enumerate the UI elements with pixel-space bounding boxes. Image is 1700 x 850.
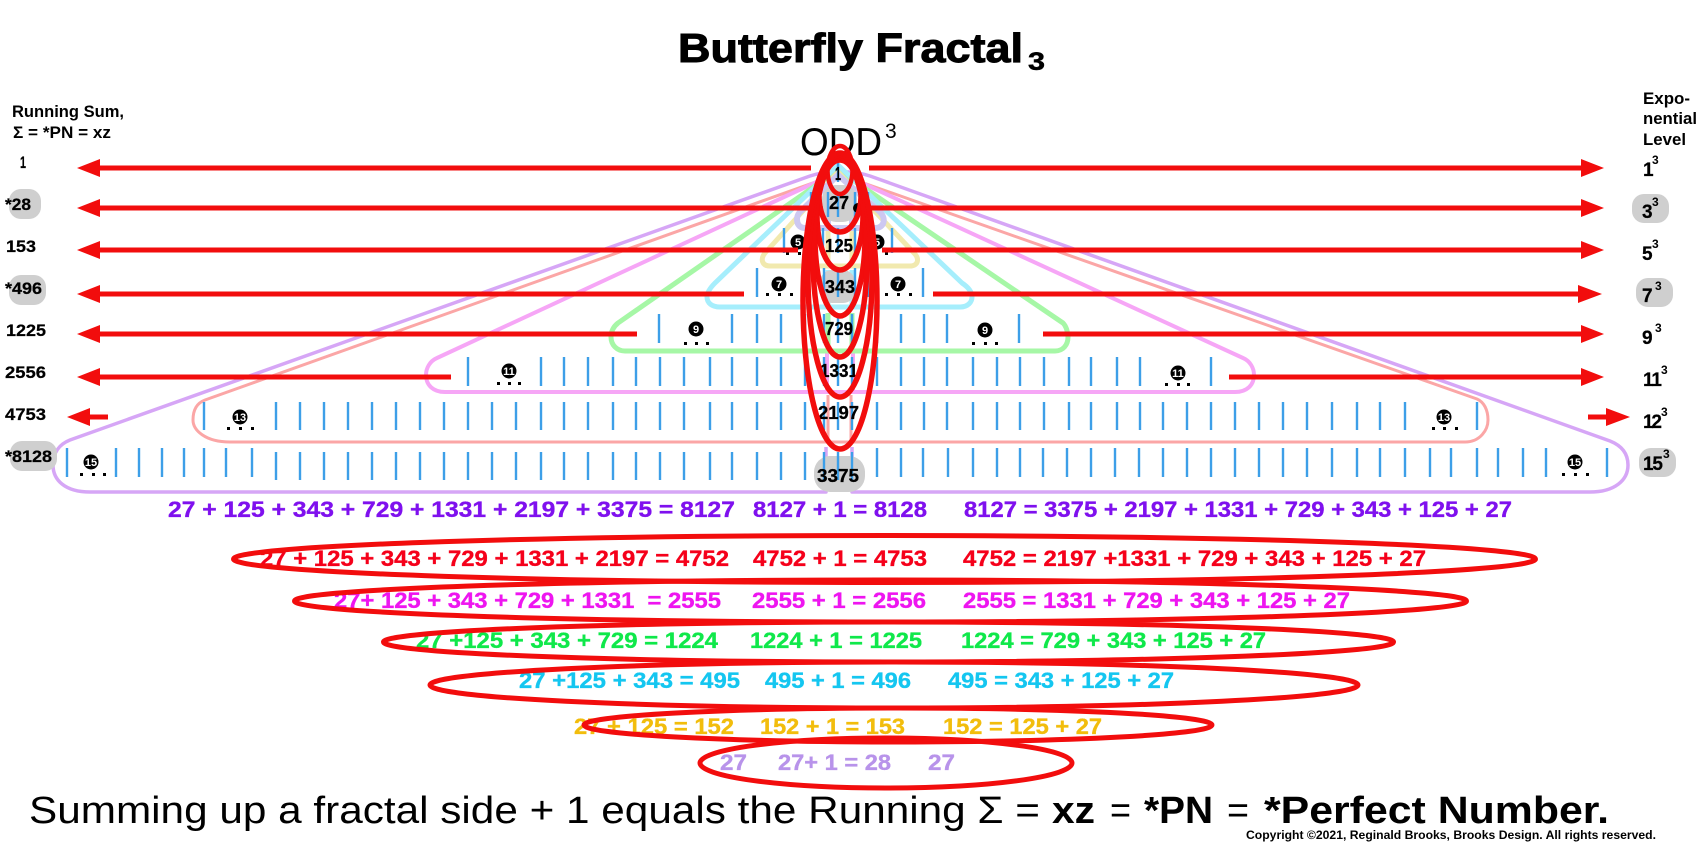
right column: exponential levels: 3 [1661, 405, 1668, 419]
equation row: level 15: 8127 = 3375 + 2197 + 1331 + 729 + 343 + 125 + 27 [964, 497, 1512, 522]
copyright: Copyright ©2021, Reginald Brooks, Brooks Design. All rights reserved. [1246, 828, 1656, 842]
wing: level 7 [707, 165, 972, 307]
left column: running sums: 4753 [5, 405, 46, 424]
central cube values: 343 [825, 277, 855, 297]
equation row: level 13: 4752 = 2197 +1331 + 729 + 343 + 125 + 27 [963, 546, 1426, 571]
central cube values: 3375 [817, 466, 859, 486]
footer statement: = [1110, 790, 1131, 832]
equation row: level 3: 27 [720, 750, 747, 775]
equation row: level 5: 27 + 125 = 152 [574, 714, 734, 739]
wing: level 9 [611, 170, 1068, 351]
right column: exponential levels: 3 [1663, 447, 1670, 461]
equation row: level 15: 27 + 125 + 343 + 729 + 1331 + 2197 + 3375 = 8127 [168, 497, 735, 522]
right column: exponential levels: 3 [1652, 237, 1659, 251]
right column: exponential levels: 12 [1643, 412, 1662, 433]
title: Butterfly Fractal [678, 25, 1023, 71]
heading: exponential level column: Level [1643, 130, 1686, 149]
numbered level badges with ellipsis dots: 11 [1172, 368, 1184, 380]
equation row: level 15: 8127 + 1 = 8128 [753, 497, 927, 522]
footer statement: = [1227, 790, 1249, 832]
equation row: level 5 [574, 714, 1102, 739]
equation row: level 11 [334, 588, 1350, 613]
wing: level 3 [797, 175, 884, 228]
left column: running sums: 1225 [6, 321, 46, 340]
wing: level 15 [53, 172, 1628, 492]
right column: exponential levels: 11 [1643, 370, 1662, 391]
equation row: level 13: 27 + 125 + 343 + 729 + 1331 + 2197 = 4752 [260, 546, 729, 571]
red ellipses around equation rows [234, 536, 1536, 788]
right column: exponential levels: 3 [1642, 202, 1653, 223]
right column: exponential levels: 3 [1655, 279, 1662, 293]
central red ellipses [803, 146, 877, 449]
central cube values: 1 [835, 164, 841, 184]
heading: running sum column: Σ = *PN = xz [13, 123, 111, 142]
equation row: level 9: 1224 + 1 = 1225 [750, 628, 922, 653]
left column: running sums: *28 [5, 195, 31, 214]
equation row: level 3: 27+ 1 = 28 [778, 750, 891, 775]
heading: running sum column [12, 102, 124, 142]
heading: exponential level column [1643, 89, 1697, 149]
central cube values: 729 [825, 319, 853, 339]
numbered level badges with ellipsis dots: 9 [982, 325, 988, 337]
numbered level badges with ellipsis dots: 7 [895, 279, 901, 291]
central cube values [817, 164, 859, 486]
right column: exponential levels [1642, 153, 1670, 475]
red arrows right [862, 159, 1630, 426]
footer statement [29, 790, 1609, 832]
left column: running sums: *8128 [5, 447, 52, 466]
blue tick rows [67, 163, 1607, 480]
equation row: level 13: 4752 + 1 = 4753 [753, 546, 927, 571]
right column: exponential levels: 3 [1652, 195, 1659, 209]
numbered level badges with ellipsis dots: 15 [85, 457, 97, 469]
equation row: level 3 [720, 750, 955, 775]
heading: ODD cubed: 3 [885, 120, 897, 143]
numbered level badges with ellipsis dots: 5 [874, 237, 880, 249]
numbered level badges with ellipsis dots: 11 [503, 366, 515, 378]
heading: running sum column: Running Sum, [12, 102, 124, 121]
right column: exponential levels: 7 [1642, 286, 1653, 307]
right column: exponential levels: 5 [1642, 244, 1653, 265]
footer statement: xz [1052, 790, 1095, 832]
equation row: level 9 [416, 628, 1266, 653]
left column: running sums: 153 [6, 237, 36, 256]
butterfly wing outlines [53, 165, 1628, 492]
wing: level 5 [762, 172, 917, 266]
numbered level badges with ellipsis dots: 13 [234, 412, 246, 424]
numbered level badges with ellipsis dots: 15 [1569, 457, 1581, 469]
footer statement: *Perfect Number. [1264, 790, 1609, 832]
central cube values: 2197 [818, 403, 859, 423]
heading: ODD cubed: ODD [800, 121, 882, 164]
equation row: level 9: 27 +125 + 343 + 729 = 1224 [416, 628, 719, 653]
equation row: level 7: 495 = 343 + 125 + 27 [948, 668, 1174, 693]
numbered level badges with ellipsis dots: 9 [693, 324, 699, 336]
equation row: level 11: 2555 + 1 = 2556 [752, 588, 926, 613]
left column: running sums [5, 153, 52, 466]
wing: level 13 [193, 174, 1488, 442]
left column: running sums: 2556 [5, 363, 46, 382]
equation row: level 5: 152 = 125 + 27 [943, 714, 1102, 739]
equation row: level 13 [260, 546, 1426, 571]
left column: running sums: 1 [20, 153, 26, 172]
red arrows left [67, 159, 818, 426]
right column: exponential levels: 9 [1642, 328, 1653, 349]
equation row: level 15 [168, 497, 1512, 522]
numbered level badges with ellipsis dots: 13 [1438, 412, 1450, 424]
title: 3 [1028, 48, 1045, 76]
numbered level badges with ellipsis dots: 7 [776, 279, 782, 291]
equation row: level 11: 2555 = 1331 + 729 + 343 + 125 + 27 [963, 588, 1350, 613]
right column: exponential levels: 3 [1655, 321, 1662, 335]
numbered level badges with ellipsis dots: 5 [795, 237, 801, 249]
central cube values: 125 [825, 236, 853, 256]
equation row: level 7 [519, 668, 1174, 693]
equation row: level 3: 27 [928, 750, 955, 775]
right column: exponential levels: 1 [1643, 160, 1654, 181]
heading: exponential level column: Expo- [1643, 89, 1690, 108]
right column: exponential levels: 3 [1652, 153, 1659, 167]
grey highlight pills [9, 185, 1676, 492]
footer statement: Summing up a fractal side + 1 equals the Running Σ = [29, 790, 1040, 832]
right column: exponential levels: 15 [1643, 454, 1663, 475]
right column: exponential levels: 3 [1661, 363, 1668, 377]
numbered level badges with ellipsis dots [80, 203, 1589, 476]
left column: running sums: *496 [5, 279, 42, 298]
equation row: level 5: 152 + 1 = 153 [760, 714, 905, 739]
footer statement: *PN [1144, 790, 1213, 832]
equation row: level 9: 1224 = 729 + 343 + 125 + 27 [961, 628, 1266, 653]
equation row: level 7: 27 +125 + 343 = 495 [519, 668, 740, 693]
heading: exponential level column: nential [1643, 109, 1697, 128]
wing: level 11 [426, 172, 1254, 392]
central cube values: 1331 [820, 361, 858, 381]
central cube values: 27 [829, 193, 849, 213]
equation row: level 11: 27+ 125 + 343 + 729 + 1331 = 2555 [334, 588, 721, 613]
equation row: level 7: 495 + 1 = 496 [765, 668, 911, 693]
